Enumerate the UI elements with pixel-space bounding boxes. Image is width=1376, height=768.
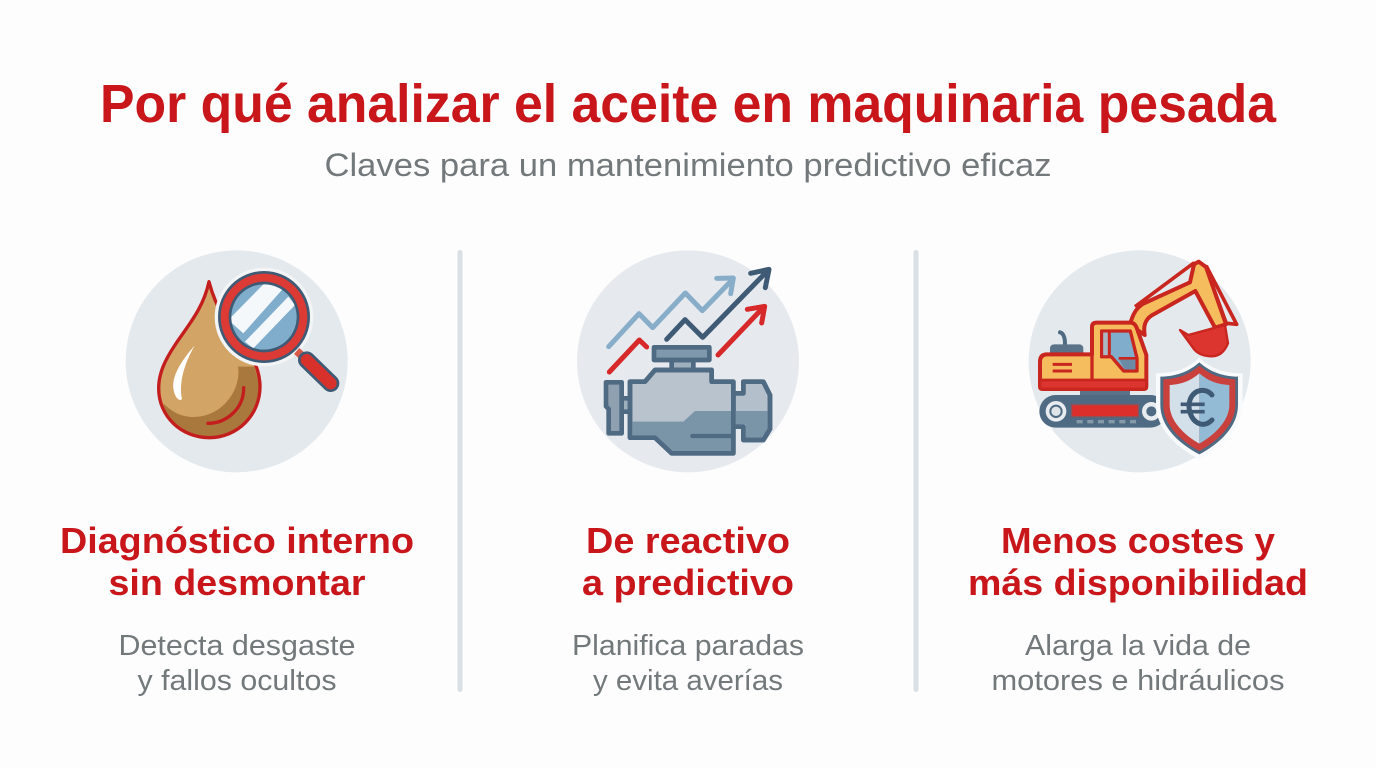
- panel: costes: [968, 250, 1308, 697]
- subtitle: Claves para un mantenimiento predictivo eficaz: [324, 147, 1052, 183]
- title: Por qué analizar el aceite en maquinaria pesada: [100, 74, 1277, 134]
- panel: predictivo: [572, 250, 804, 697]
- icon: excavator and euro shield: [1029, 250, 1251, 472]
- body text: Planifica paradas: [572, 630, 804, 662]
- icon: oil drop and magnifier: [126, 250, 348, 472]
- heading: De reactivo: [586, 520, 790, 561]
- panel: costes: más disponibilidad: [968, 562, 1308, 603]
- body text: Alarga la vida de: [1025, 630, 1251, 662]
- panel: diagnostico: y fallos ocultos: [138, 665, 336, 697]
- body text: Detecta desgaste: [118, 630, 356, 662]
- panel: predictivo: y evita averías: [593, 665, 783, 697]
- heading: Menos costes y: [1001, 520, 1275, 561]
- icon: engine and rising arrows: [577, 250, 799, 472]
- panel: predictivo: a predictivo: [582, 562, 794, 603]
- panel: diagnostico: sin desmontar: [108, 562, 366, 603]
- heading: Diagnóstico interno: [60, 520, 414, 561]
- panel: diagnostico: [60, 250, 414, 697]
- panel: costes: motores e hidráulicos: [992, 665, 1284, 697]
